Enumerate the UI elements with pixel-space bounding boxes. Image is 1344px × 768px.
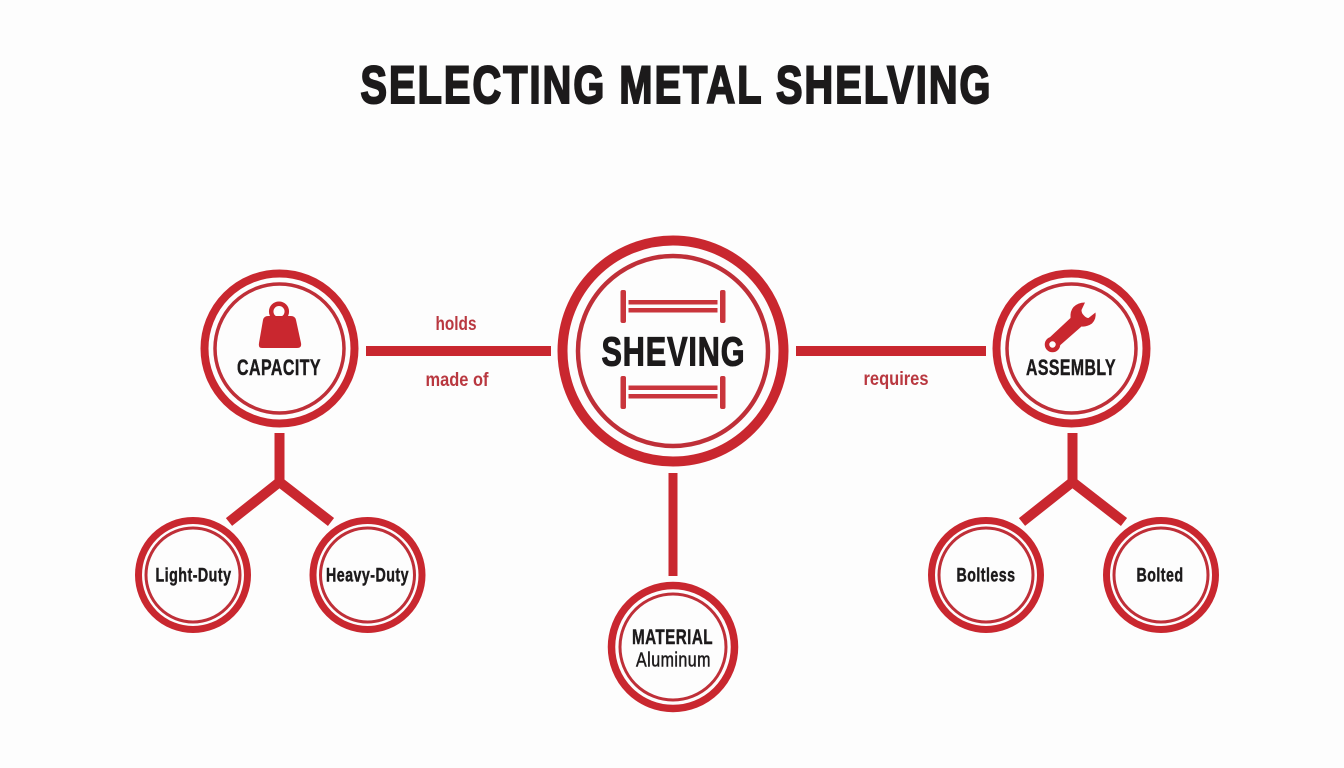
node label: heavy-duty: Heavy-Duty bbox=[326, 566, 409, 586]
icon: wrench bbox=[1047, 302, 1096, 350]
arrow: shelving to assembly connector bbox=[796, 346, 986, 356]
node: shelving bbox=[562, 240, 784, 462]
node: assembly bbox=[996, 274, 1146, 424]
label: made of: made of bbox=[426, 370, 489, 391]
arrow: shelving to material connector bbox=[668, 473, 678, 576]
node: heavy-duty bbox=[313, 520, 422, 630]
icon: weight bbox=[259, 304, 301, 348]
node label: light-duty: Light-Duty bbox=[156, 566, 232, 586]
node label: aluminum: Aluminum bbox=[636, 650, 711, 672]
node: capacity bbox=[204, 274, 354, 424]
node label: boltless: Boltless bbox=[956, 566, 1016, 586]
node label: shelving: SHEVING bbox=[602, 328, 746, 374]
icon: bottom shelf bbox=[620, 376, 726, 409]
connector: assembly branches bbox=[1022, 433, 1124, 522]
node label: bolted: Bolted bbox=[1136, 566, 1184, 586]
node: boltless bbox=[932, 520, 1040, 630]
node label: capacity: CAPACITY bbox=[237, 355, 321, 380]
label: requires: requires bbox=[864, 369, 928, 390]
label: holds: holds bbox=[436, 314, 476, 335]
connector: capacity branches bbox=[229, 433, 331, 522]
title: SELECTING METAL SHELVING bbox=[360, 56, 992, 115]
node label: material: MATERIAL bbox=[632, 626, 713, 649]
node: bolted bbox=[1106, 520, 1216, 630]
arrow: capacity to shelving connector bbox=[366, 346, 551, 356]
node label: assembly: ASSEMBLY bbox=[1026, 355, 1116, 380]
node: material bbox=[612, 586, 734, 708]
node: light-duty bbox=[138, 520, 248, 630]
icon: top shelf bbox=[620, 290, 726, 323]
